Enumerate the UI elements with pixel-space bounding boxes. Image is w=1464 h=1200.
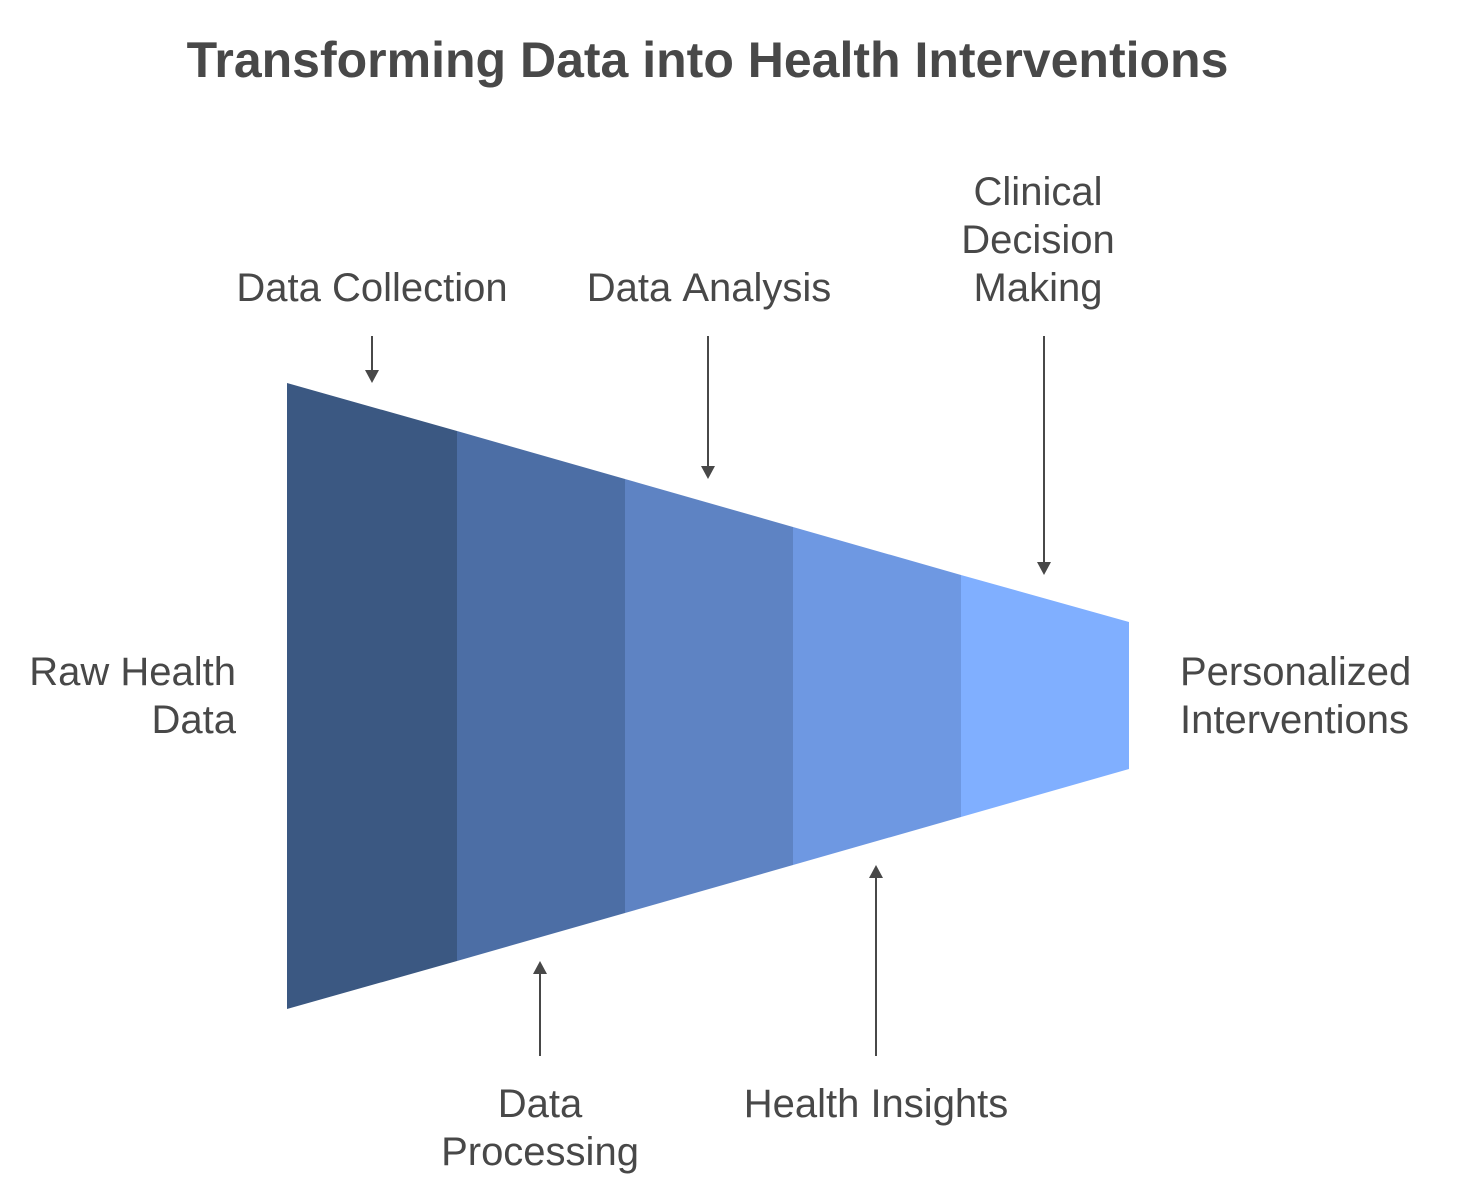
label: Health Insights: Health Insights (744, 1082, 1008, 1126)
arrow: Clinical Decision Making (1037, 336, 1051, 575)
label: Raw Health Data: Data (152, 698, 237, 742)
arrow: Data Analysis (701, 336, 715, 479)
arrow: Data Collection (365, 336, 379, 383)
funnel segment 4: health insights (793, 527, 961, 865)
label: Data Analysis: Data Analysis (587, 266, 831, 310)
title: Transforming Data into Health Interventions (187, 32, 1228, 88)
funnel segment 2: data processing (457, 431, 625, 961)
arrow: Data Processing (533, 961, 547, 1056)
label: Clinical Decision Making: Decision (961, 218, 1115, 262)
label: Personalized Interventions: Personalized (1180, 650, 1411, 694)
label: Data Collection: Data Collection (236, 266, 508, 310)
label: Data Processing: Data (498, 1082, 583, 1126)
label: Data Processing: Processing (441, 1130, 639, 1174)
funnel segment 5: clinical decision making (961, 575, 1129, 817)
label: Clinical Decision Making: Clinical (974, 170, 1102, 214)
funnel segment 1: raw data collection (287, 383, 457, 1009)
label: Personalized Interventions: Interventions (1180, 698, 1409, 742)
arrow: Health Insights (869, 865, 883, 1056)
funnel segment 3: data analysis (625, 479, 793, 913)
funnel diagram (287, 383, 1129, 1009)
label: Clinical Decision Making: Making (974, 266, 1102, 310)
label: Raw Health Data: Raw Health (29, 650, 236, 694)
